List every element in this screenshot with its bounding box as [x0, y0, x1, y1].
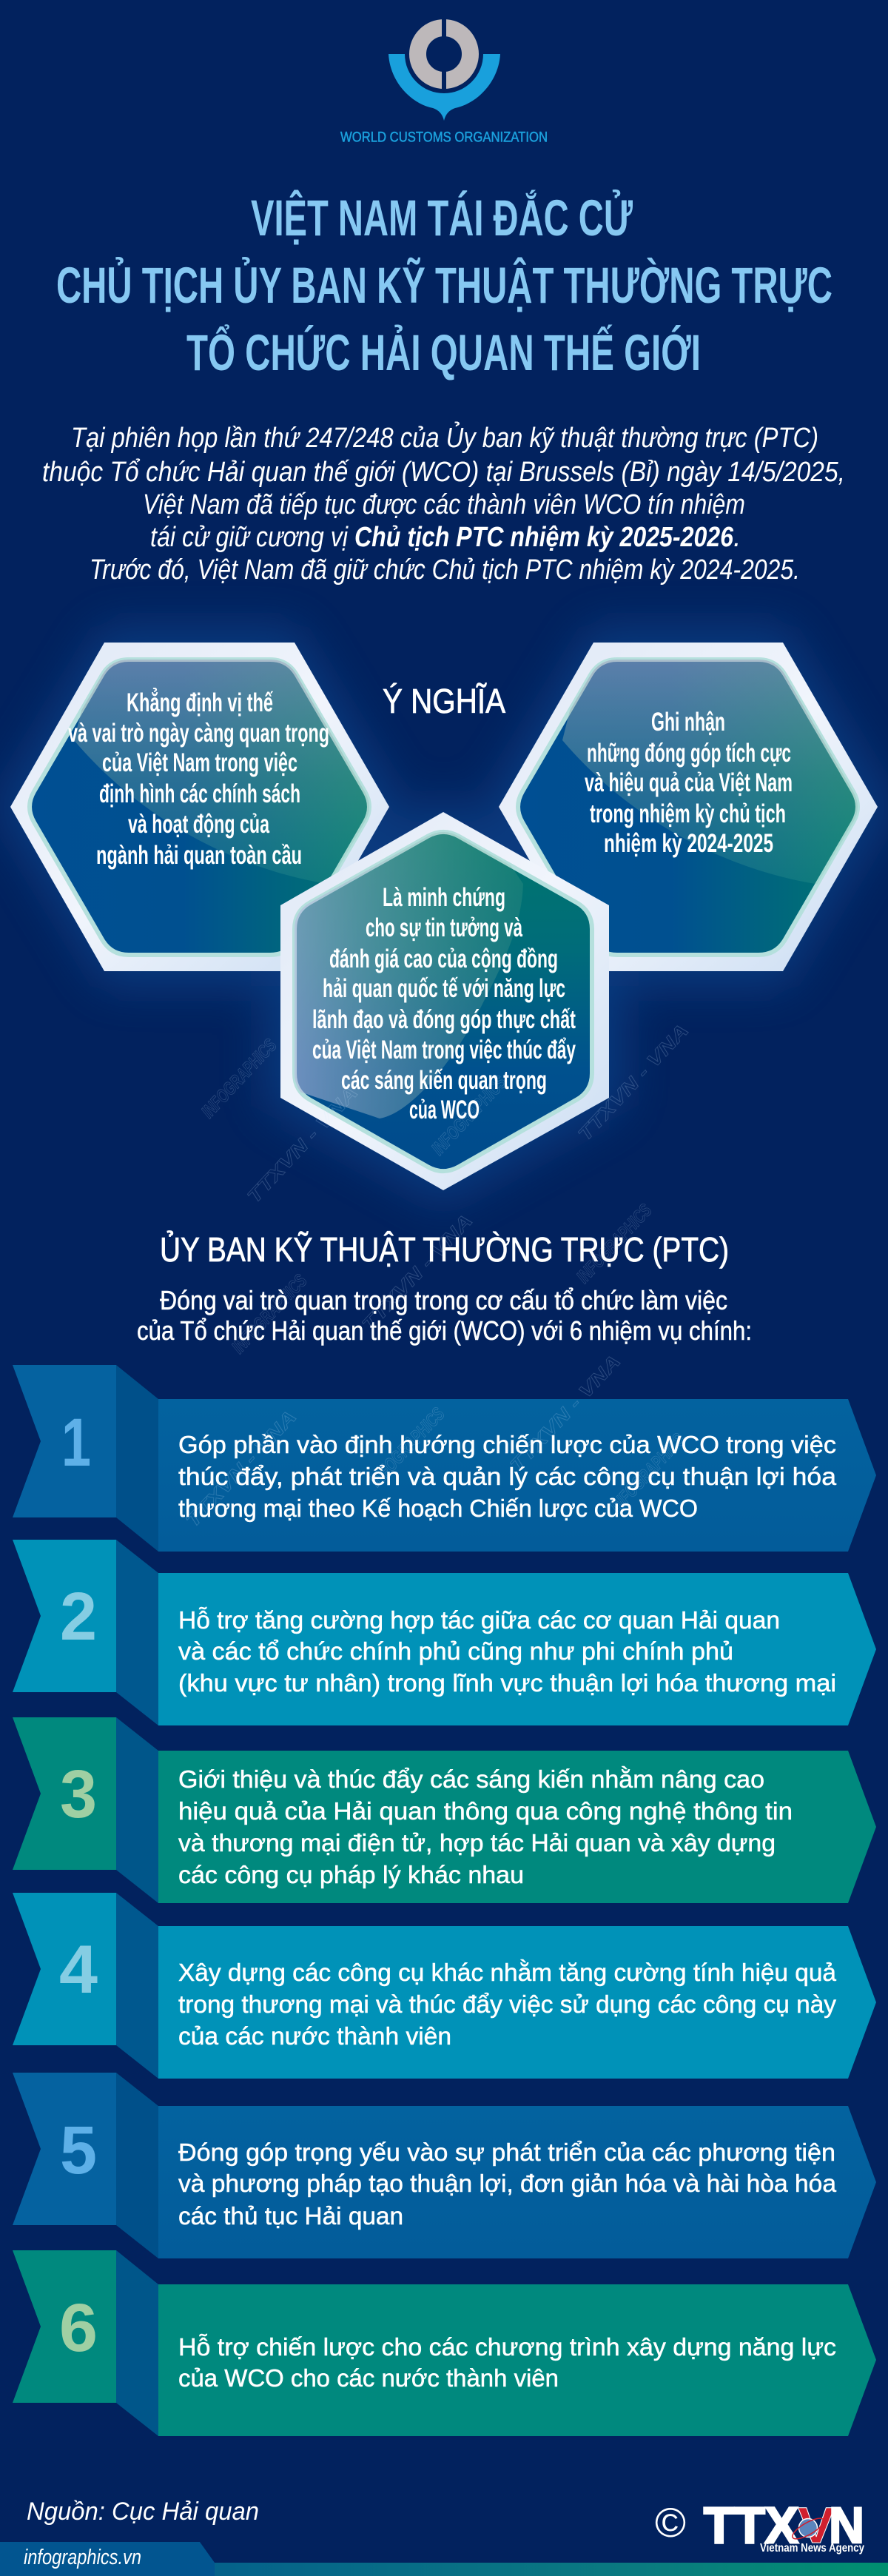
- footer bar: [0, 2542, 888, 2576]
- text: card 3: [178, 1765, 793, 1888]
- watermarks: [182, 1020, 693, 1532]
- intro text: Việt Nam đã tiếp tục được các thành viên WCO tín nhiệm: [143, 489, 745, 520]
- intro text: [42, 420, 845, 586]
- text: card 2: Hỗ trợ tăng cường hợp tác giữa các cơ quan Hải quan: [178, 1606, 780, 1634]
- text: card 1: thương mại theo Kế hoạch Chiến lược của WCO: [178, 1495, 698, 1522]
- number 2: 2: [60, 1579, 97, 1654]
- card 1: [13, 1365, 876, 1552]
- text: PTC description: của Tổ chức Hải quan thế giới (WCO) với 6 nhiệm vụ chính:: [137, 1315, 752, 1346]
- source: Nguồn: Cục Hải quan: [27, 2498, 259, 2526]
- text: center hexagon: đánh giá cao của cộng đồng: [329, 945, 558, 973]
- panel: left hexagon: [10, 643, 389, 971]
- intro text: .: [733, 522, 741, 553]
- watermarks: TTXVN - VNA: [182, 1406, 300, 1532]
- text: card 3: và thương mại điện tử, hợp tác Hải quan và xây dựng: [178, 1829, 776, 1856]
- text: card 2: và các tổ chức chính phủ cũng như phi chính phủ: [178, 1637, 733, 1665]
- text: card 4: Xây dựng các công cụ khác nhằm tăng cường tính hiệu quả: [178, 1959, 837, 1986]
- text: card 5: và phương pháp tạo thuận lợi, đơn giản hóa và hài hòa hóa: [178, 2170, 837, 2197]
- text: card 3: Giới thiệu và thúc đẩy các sáng kiến nhằm nâng cao: [178, 1765, 764, 1793]
- icon: TTXVN logo: [655, 2497, 864, 2555]
- title: [56, 189, 832, 381]
- card 5: [13, 2073, 876, 2258]
- panel: center hexagon: [280, 812, 609, 1190]
- text: center hexagon: lãnh đạo và đóng góp thực chất: [312, 1005, 576, 1034]
- card 3: [13, 1717, 876, 1903]
- text: card 4: của các nước thành viên: [178, 2022, 451, 2050]
- watermarks: INFOGRAPHICS: [198, 1035, 281, 1122]
- icon: TTXVN logo: N: [829, 2497, 864, 2554]
- text: card 1: [178, 1431, 837, 1522]
- card 2: [13, 1540, 876, 1725]
- text: card 4: trong thương mại và thúc đẩy việc sử dụng các công cụ này: [178, 1990, 837, 2018]
- text: card 3: hiệu quả của Hải quan thông qua công nghệ thông tin: [178, 1797, 793, 1825]
- text: left hexagon: của Việt Nam trong việc: [102, 748, 297, 777]
- text: PTC description: Đóng vai trò quan trọng trong cơ cấu tổ chức làm việc: [160, 1285, 727, 1315]
- intro text: Chủ tịch PTC nhiệm kỳ 2025-2026: [354, 522, 734, 553]
- text: center hexagon: Là minh chứng: [383, 883, 505, 912]
- icon: TTXVN logo: ©: [655, 2499, 686, 2546]
- text: right hexagon: trong nhiệm kỳ chủ tịch: [590, 799, 786, 828]
- icon: WCO logo: [340, 18, 548, 145]
- watermarks: INFOGRAPHICS: [573, 1200, 656, 1287]
- text: card 4: [178, 1959, 837, 2050]
- watermarks: INFOGRAPHICS: [428, 1072, 511, 1159]
- text: card 1: Góp phần vào định hướng chiến lược của WCO trong việc: [178, 1431, 836, 1458]
- text: card 6: [178, 2333, 836, 2392]
- text: PTC description: [137, 1285, 752, 1346]
- text: right hexagon: [585, 708, 793, 858]
- icon: WCO logo: WORLD CUSTOMS ORGANIZATION: [340, 130, 548, 145]
- website: infographics.vn: [24, 2546, 141, 2569]
- title: VIỆT NAM TÁI ĐẮC CỬ: [251, 189, 633, 246]
- watermarks: TTXVN - VNA: [358, 1210, 477, 1335]
- number 4: 4: [59, 1932, 98, 2008]
- heading: PTC: ỦY BAN KỸ THUẬT THƯỜNG TRỰC (PTC): [160, 1230, 729, 1269]
- text: left hexagon: ngành hải quan toàn cầu: [96, 841, 302, 870]
- icon: TTXVN logo: TTX: [704, 2497, 798, 2554]
- text: left hexagon: Khẳng định vị thế: [127, 688, 273, 717]
- text: left hexagon: định hình các chính sách: [99, 779, 300, 808]
- icon: TTXVN logo: Vietnam News Agency: [760, 2542, 864, 2555]
- heading: Ý NGHĨA: Ý NGHĨA: [383, 682, 505, 720]
- text: right hexagon: Ghi nhận: [651, 708, 725, 737]
- text: right hexagon: và hiệu quả của Việt Nam: [585, 768, 793, 797]
- number 6: 6: [59, 2290, 98, 2366]
- text: center hexagon: hải quan quốc tế với năng lực: [323, 974, 565, 1003]
- number 1: 1: [61, 1405, 91, 1480]
- number 5: 5: [60, 2113, 97, 2188]
- text: right hexagon: nhiệm kỳ 2024-2025: [604, 829, 773, 858]
- text: card 5: các thủ tục Hải quan: [178, 2202, 403, 2230]
- watermarks: TTXVN - VNA: [243, 1082, 362, 1207]
- text: card 1: thúc đẩy, phát triển và quản lý các công cụ thuận lợi hóa: [178, 1463, 837, 1490]
- text: center hexagon: cho sự tin tưởng và: [366, 913, 522, 942]
- panel: hexagon glow: [0, 628, 888, 1205]
- text: card 2: (khu vực tư nhân) trong lĩnh vực thuận lợi hóa thương mại: [178, 1669, 836, 1697]
- panel: right hexagon: [499, 643, 878, 971]
- watermarks: INFOGRAPHICS: [366, 1403, 449, 1491]
- text: card 2: [178, 1606, 836, 1697]
- text: center hexagon: của WCO: [409, 1096, 480, 1124]
- text: left hexagon: và hoạt động của: [128, 810, 269, 839]
- text: center hexagon: [312, 883, 576, 1124]
- text: card 5: Đóng góp trọng yếu vào sự phát triển của các phương tiện: [178, 2139, 835, 2166]
- text: left hexagon: [68, 688, 329, 870]
- card 6: [13, 2250, 876, 2436]
- text: left hexagon: và vai trò ngày càng quan trọng: [68, 719, 329, 748]
- intro text: tái cử giữ cương vị: [150, 522, 349, 553]
- watermarks: TTXVN - VNA: [574, 1020, 693, 1145]
- watermarks: TTXVN - VNA: [506, 1351, 625, 1476]
- icon: TTXVN logo: V: [798, 2497, 835, 2554]
- card 4: [13, 1893, 876, 2079]
- text: card 5: [178, 2139, 837, 2230]
- text: center hexagon: của Việt Nam trong việc thúc đẩy: [312, 1036, 576, 1064]
- watermarks: INFOGRAPHICS: [228, 1270, 312, 1358]
- text: card 6: của WCO cho các nước thành viên: [178, 2364, 559, 2392]
- text: card 6: Hỗ trợ chiến lược cho các chương trình xây dựng năng lực: [178, 2333, 836, 2361]
- text: card 3: các công cụ pháp lý khác nhau: [178, 1861, 524, 1888]
- text: center hexagon: các sáng kiến quan trọng: [341, 1066, 547, 1095]
- number 3: 3: [60, 1757, 97, 1832]
- watermarks: INFOGRAPHICS: [606, 1429, 690, 1517]
